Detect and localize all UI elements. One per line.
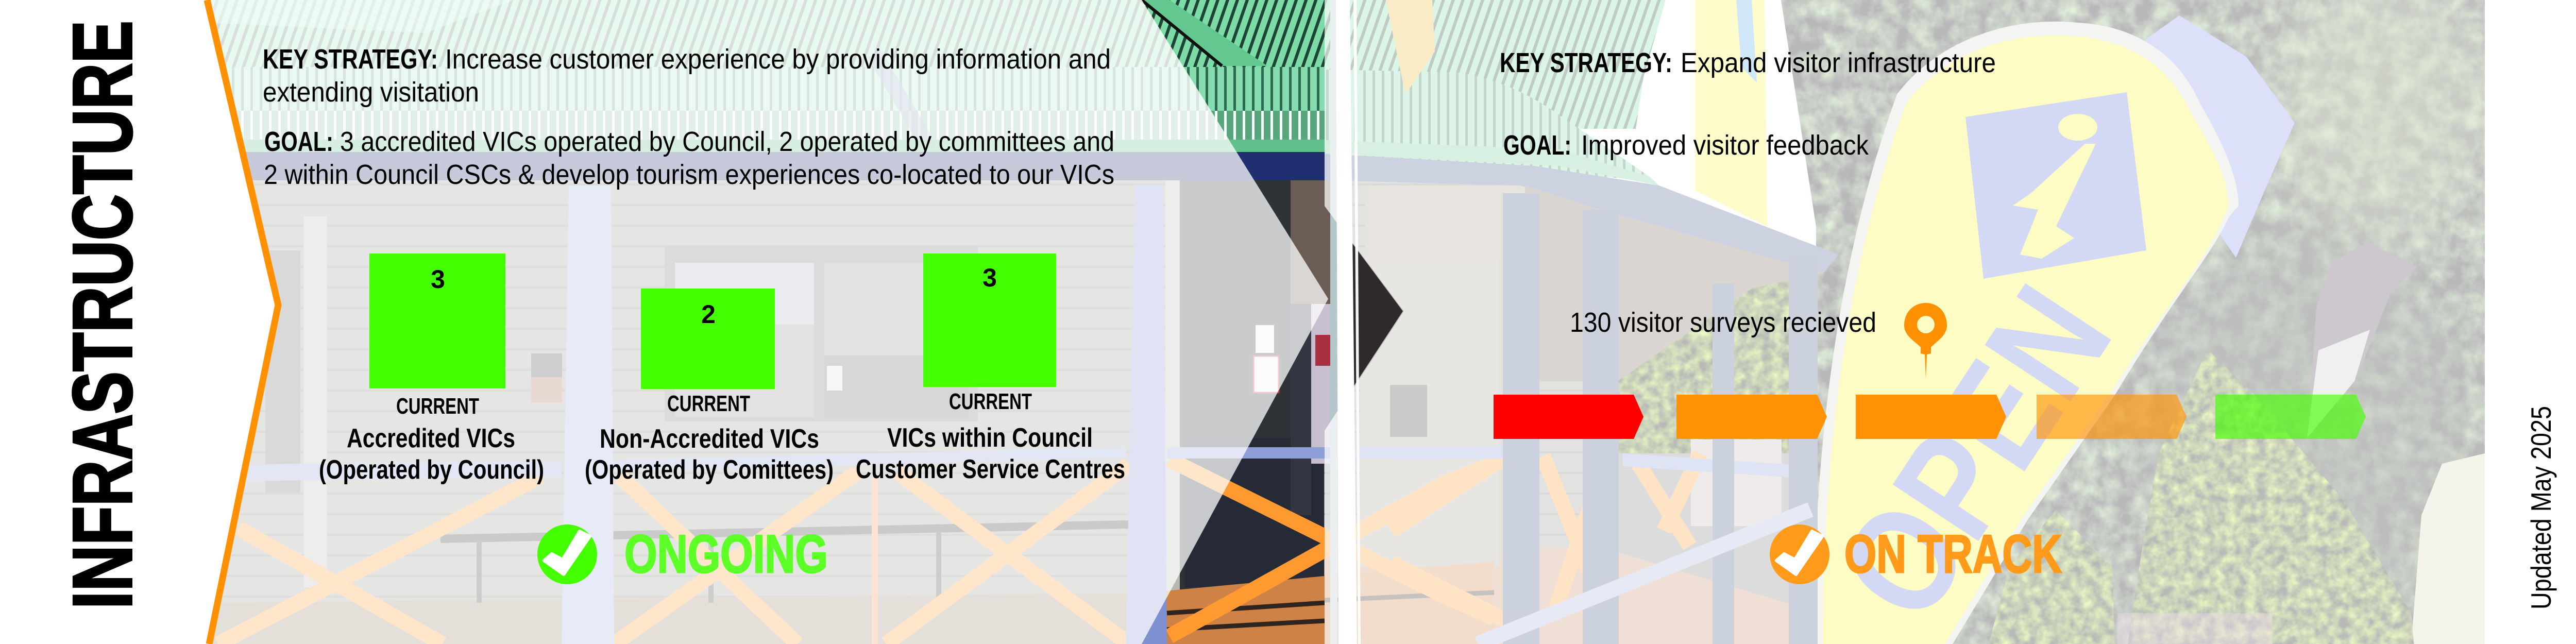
sky — [1633, 0, 1816, 289]
porch ceiling — [1525, 185, 1824, 381]
porch opening greenery — [1607, 247, 1814, 464]
goal text: GOAL: — [1503, 130, 1571, 161]
dark centre sliver tip — [1338, 223, 1404, 412]
centre and left roof — [206, 0, 1325, 67]
small flag lower — [2307, 330, 2370, 438]
bench legs — [479, 531, 939, 603]
icon: orange check — [1770, 524, 1829, 584]
bar: VICs within council: CURRENT — [949, 389, 1032, 414]
goal text — [264, 126, 1114, 190]
ridge line — [1142, 0, 1222, 66]
icon: location pin — [1904, 303, 1947, 379]
yellow flag small — [1386, 0, 1435, 93]
progress: stage 3 — [1856, 395, 2006, 439]
bar: non-accredited VICs: Non-Accredited VICs — [600, 424, 819, 454]
white frame — [304, 216, 327, 587]
yellow i dot — [2058, 114, 2097, 141]
bar: VICs within council — [856, 253, 1125, 484]
key strategy text: KEY STRATEGY: — [1500, 47, 1672, 78]
orange chevron line — [207, 0, 278, 644]
gutter — [206, 140, 1325, 152]
right roof — [1325, 0, 1666, 129]
bar: VICs within council: Customer Service Centres — [856, 454, 1125, 484]
garden path — [2411, 453, 2485, 644]
bush — [2128, 349, 2416, 644]
post 2 — [1126, 185, 1167, 644]
eave — [1325, 140, 1659, 185]
deck — [1325, 546, 1803, 644]
key strategy text: KEY STRATEGY: — [263, 44, 438, 75]
curved roof — [206, 67, 1325, 116]
key strategy text — [263, 44, 1111, 108]
porch lower right — [1607, 453, 1814, 644]
big yellow flag — [1823, 36, 2228, 644]
roof left hip — [206, 0, 514, 33]
lower left floor — [206, 592, 1180, 644]
icon: green check — [537, 524, 597, 584]
panel: on track — [1325, 0, 2485, 644]
panel wash — [1325, 0, 2485, 644]
notice red — [531, 377, 562, 403]
poster red — [1315, 335, 1331, 366]
key strategy text: Expand visitor infrastructure — [1681, 47, 1996, 78]
pole shadow on roof — [874, 54, 934, 155]
goal text: 2 within Council CSCs & develop tourism experiences co-located to our VICs — [264, 159, 1114, 190]
progress: stage 5 — [2215, 395, 2366, 439]
left dark column — [265, 250, 300, 493]
key strategy text — [1500, 47, 1996, 78]
key strategy text: extending visitation — [263, 77, 479, 108]
floor shadows — [1167, 592, 1494, 630]
progress: stage 2 — [1676, 395, 1827, 439]
left white margin — [0, 0, 278, 644]
porch wall — [1365, 185, 1530, 556]
bar: non-accredited VICs: 2 — [701, 300, 716, 329]
curved roof dome — [1325, 70, 1650, 181]
railing — [206, 446, 1818, 482]
bar: accredited VICs: CURRENT — [396, 394, 479, 419]
yellow i body — [2013, 144, 2096, 259]
bar: accredited VICs: (Operated by Council) — [319, 455, 544, 485]
sign board — [1691, 439, 1782, 526]
bright floor — [1165, 562, 1494, 644]
door notice red border — [1253, 356, 1279, 393]
right white margin — [2485, 0, 2576, 644]
thin pole — [1353, 0, 1361, 644]
back flag — [2128, 15, 2295, 258]
bar: accredited VICs — [319, 253, 544, 485]
dark tree mass — [2143, 216, 2473, 608]
panel wash — [207, 0, 1328, 644]
bench — [440, 524, 1128, 539]
front bush — [1989, 510, 2115, 644]
poster strip — [1311, 304, 1337, 464]
big yellow flag border — [1814, 22, 2239, 644]
diagonal handrail — [1478, 510, 1810, 644]
noticeboard — [1360, 258, 1499, 567]
soffit — [206, 152, 1325, 180]
goal text: 3 accredited VICs operated by Council, 2 operated by committees and — [340, 126, 1114, 157]
thin vertical brace — [872, 474, 878, 644]
goal text: GOAL: — [264, 126, 333, 157]
white pole edge — [1330, 0, 1337, 644]
bar: non-accredited VICs: (Operated by Comittees) — [585, 455, 834, 485]
door notices — [1256, 325, 1274, 353]
bar: accredited VICs: 3 — [431, 265, 445, 294]
post 1 — [562, 185, 614, 644]
flowers — [2117, 613, 2272, 644]
goal text: Improved visitor feedback — [1581, 130, 1869, 161]
OPEN flag lettering: OPEN — [1807, 259, 2143, 644]
key strategy text: Increase customer experience by providing information and — [445, 44, 1111, 75]
survey count: 130 visitor surveys recieved — [1570, 307, 1876, 338]
updated date: Updated May 2025 — [2525, 406, 2557, 609]
bar: VICs within council: 3 — [982, 263, 997, 292]
door inner dark — [1185, 438, 1324, 587]
progress: stage 1 — [1494, 395, 1643, 439]
bar: non-accredited VICs: CURRENT — [667, 391, 750, 416]
white pole — [1336, 0, 1357, 644]
building wall — [206, 175, 1597, 644]
door frame — [1165, 180, 1181, 644]
orange braces — [218, 453, 1700, 644]
roof ridge — [1142, 0, 1267, 66]
yellow sign — [1695, 0, 1767, 227]
posters column — [1291, 304, 1311, 515]
roof extra wash — [207, 0, 1229, 140]
progress: stage 4 — [2037, 395, 2187, 439]
right posts — [1503, 193, 1818, 644]
bar: VICs within council: VICs within Council — [887, 423, 1093, 453]
window — [665, 246, 978, 421]
centre door — [1180, 180, 1291, 644]
dark poster — [1390, 385, 1427, 437]
blue i square — [1965, 92, 2146, 279]
small flag — [2309, 242, 2417, 412]
brown boards — [1291, 180, 1337, 304]
status: on track: ON TRACK — [1844, 524, 2062, 584]
bar: accredited VICs: Accredited VICs — [347, 423, 515, 453]
status: ongoing: ONGOING — [624, 524, 828, 584]
light tree canopy — [2267, 0, 2494, 237]
sign blue shape — [1736, 0, 1757, 82]
trees — [1633, 0, 2485, 644]
notices — [531, 353, 562, 377]
roof ribs — [206, 111, 1325, 140]
panel: ongoing — [207, 0, 1328, 644]
soffit — [1325, 154, 1838, 273]
bar: non-accredited VICs — [585, 289, 834, 485]
